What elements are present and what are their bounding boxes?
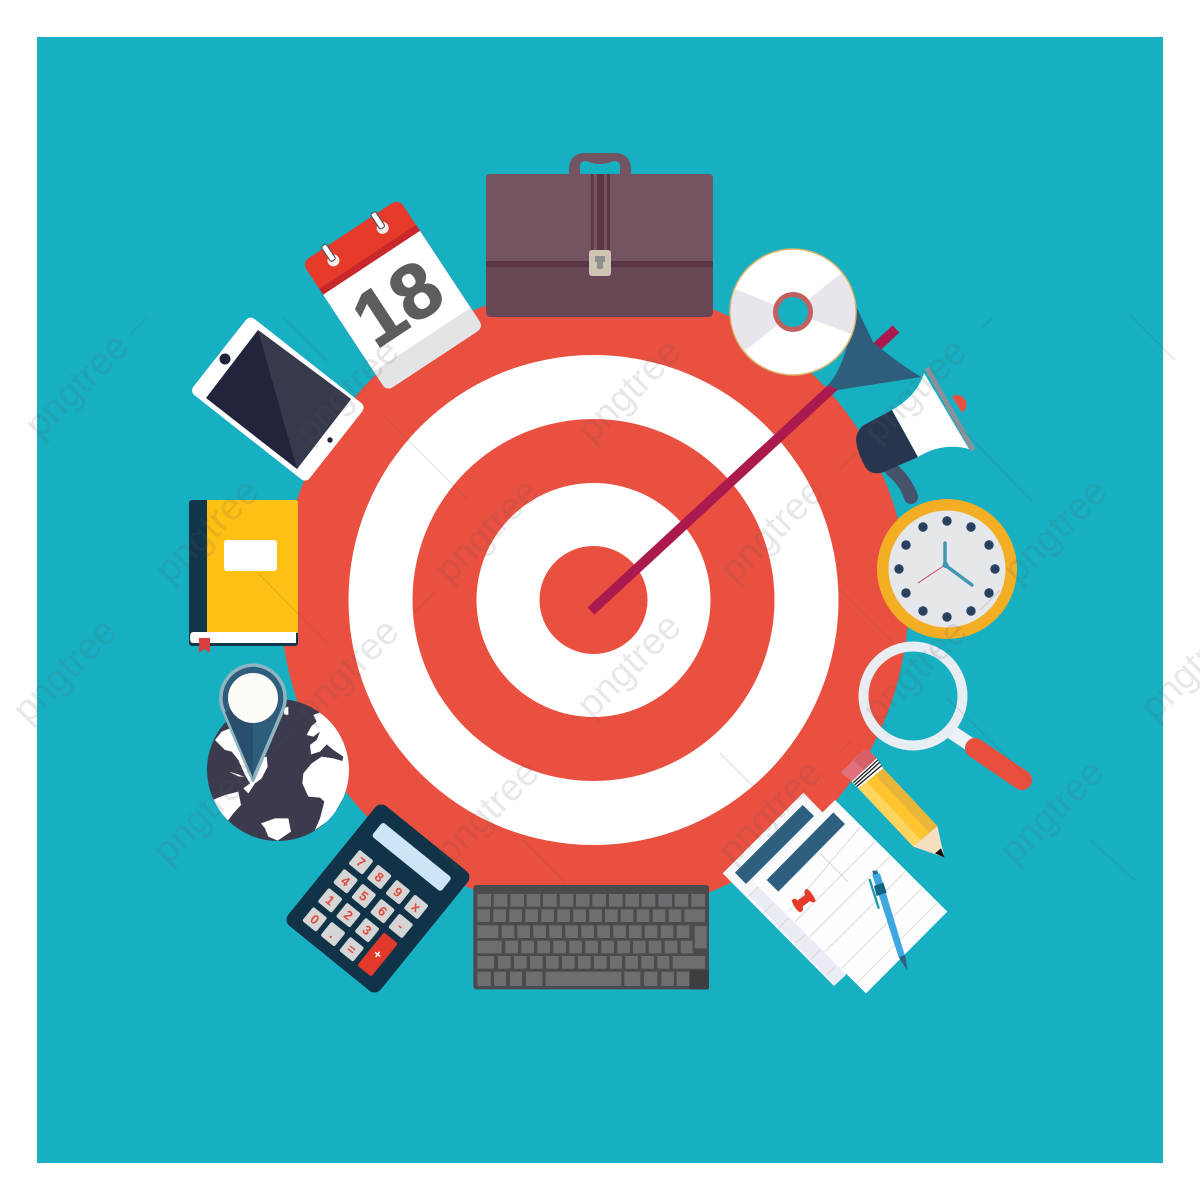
calculator key labels: 9: [390, 884, 405, 900]
watermark text: pngtree: [287, 331, 408, 451]
icon: pen: [868, 871, 907, 971]
icon: magnifying glass: [864, 646, 1022, 780]
calculator key labels: 2: [341, 907, 356, 923]
watermark text: pngtree: [569, 331, 690, 451]
icon: compact disc: [730, 249, 856, 375]
icon: keyboard: [473, 885, 709, 989]
calculator key labels: 7: [353, 854, 369, 870]
icon: tablet: [190, 315, 366, 483]
calculator key labels: 1: [323, 892, 338, 908]
calculator key labels: =: [344, 941, 360, 958]
icon: notebook: [189, 500, 298, 653]
front sheet: [753, 800, 947, 993]
watermark text: pngtree: [855, 331, 976, 451]
icon: push pin: [792, 889, 816, 912]
watermark text: pngtree: [145, 752, 266, 872]
watermark text: pngtree: [710, 752, 831, 872]
icon: documents with pen: [723, 793, 947, 993]
calculator key labels: [307, 854, 424, 973]
calculator key labels: 4: [338, 873, 354, 890]
calculator key labels: 5: [356, 888, 371, 904]
calculator key labels: 6: [375, 903, 390, 919]
watermark text: pngtree: [855, 611, 976, 731]
watermark text: [5, 326, 1200, 872]
icon: globe with map pin: [207, 665, 352, 841]
calendar date: 18: [337, 243, 458, 364]
watermark text: pngtree: [992, 752, 1113, 872]
icon: calendar: [301, 197, 484, 391]
icon: pencil: [841, 749, 945, 858]
watermark text: pngtree: [147, 471, 268, 591]
calculator key labels: 8: [372, 869, 387, 885]
calculator key labels: 3: [360, 922, 375, 938]
watermark text: pngtree: [995, 471, 1116, 591]
front sheet header bar: [767, 812, 845, 892]
watermark text: pngtree: [569, 606, 690, 726]
arrow shaft: [591, 329, 896, 611]
calculator key labels: 0: [307, 911, 322, 927]
calculator key labels: x: [409, 899, 424, 916]
back sheet: [723, 793, 914, 986]
icon: wall clock: [877, 499, 1017, 639]
calculator key labels: -: [394, 919, 407, 933]
watermark text: pngtree: [712, 471, 833, 591]
arrow fletching: [828, 300, 921, 390]
calculator key labels: +: [370, 946, 386, 963]
watermark text: pngtree: [427, 752, 548, 872]
watermark text: pngtree: [17, 326, 138, 446]
watermark text: pngtree: [427, 471, 548, 591]
icon: megaphone: [856, 368, 973, 497]
back sheet header bar: [735, 805, 814, 884]
watermark text: pngtree: [287, 611, 408, 731]
icon: calculator: [283, 801, 473, 996]
watermark text: pngtree: [5, 611, 126, 731]
calculator key labels: .: [327, 927, 339, 941]
icon: briefcase: [486, 153, 713, 317]
target bullseye: [280, 286, 908, 914]
